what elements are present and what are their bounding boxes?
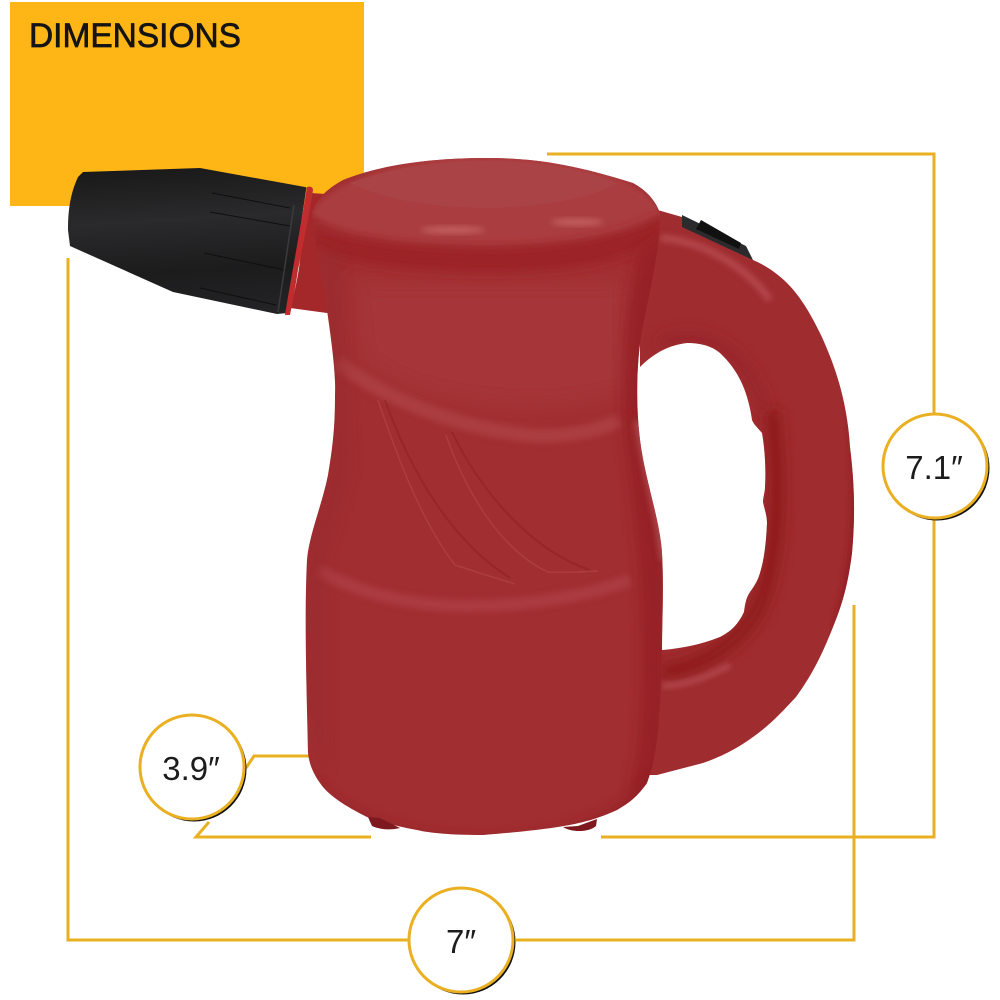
- neck: [290, 193, 340, 313]
- nozzle: [68, 168, 306, 314]
- upper light band: [337, 362, 620, 436]
- power switch: [682, 215, 753, 260]
- lid rim: [312, 155, 662, 245]
- handle: [640, 210, 854, 775]
- base shade: [318, 781, 648, 835]
- lid dark band: [312, 215, 662, 272]
- lid highlights: [421, 226, 485, 234]
- upper body lighter zone: [610, 298, 638, 378]
- fin details: [378, 400, 598, 584]
- fin shadows: [385, 400, 590, 578]
- badge: width 7: 7″: [446, 923, 476, 960]
- main body: [300, 150, 670, 850]
- yellow heading block: [10, 2, 364, 206]
- feet: [368, 817, 597, 831]
- nozzle ring: [285, 187, 313, 315]
- title: DIMENSIONS: [29, 17, 241, 55]
- badge: depth 3.9: 3.9″: [162, 750, 220, 787]
- badge: height 7.1: 7.1″: [905, 449, 963, 486]
- badge: depth 3.9: [140, 715, 246, 822]
- dimension lines: [68, 154, 934, 940]
- badge: height 7.1: [883, 414, 990, 520]
- lower light band: [318, 570, 630, 606]
- lid inner lens: [351, 172, 385, 184]
- badge: width 7: [409, 888, 516, 994]
- product: air blower: [68, 150, 865, 850]
- right light edge: [638, 420, 664, 560]
- right dark shade: [622, 242, 663, 799]
- left edge shade: [306, 314, 342, 706]
